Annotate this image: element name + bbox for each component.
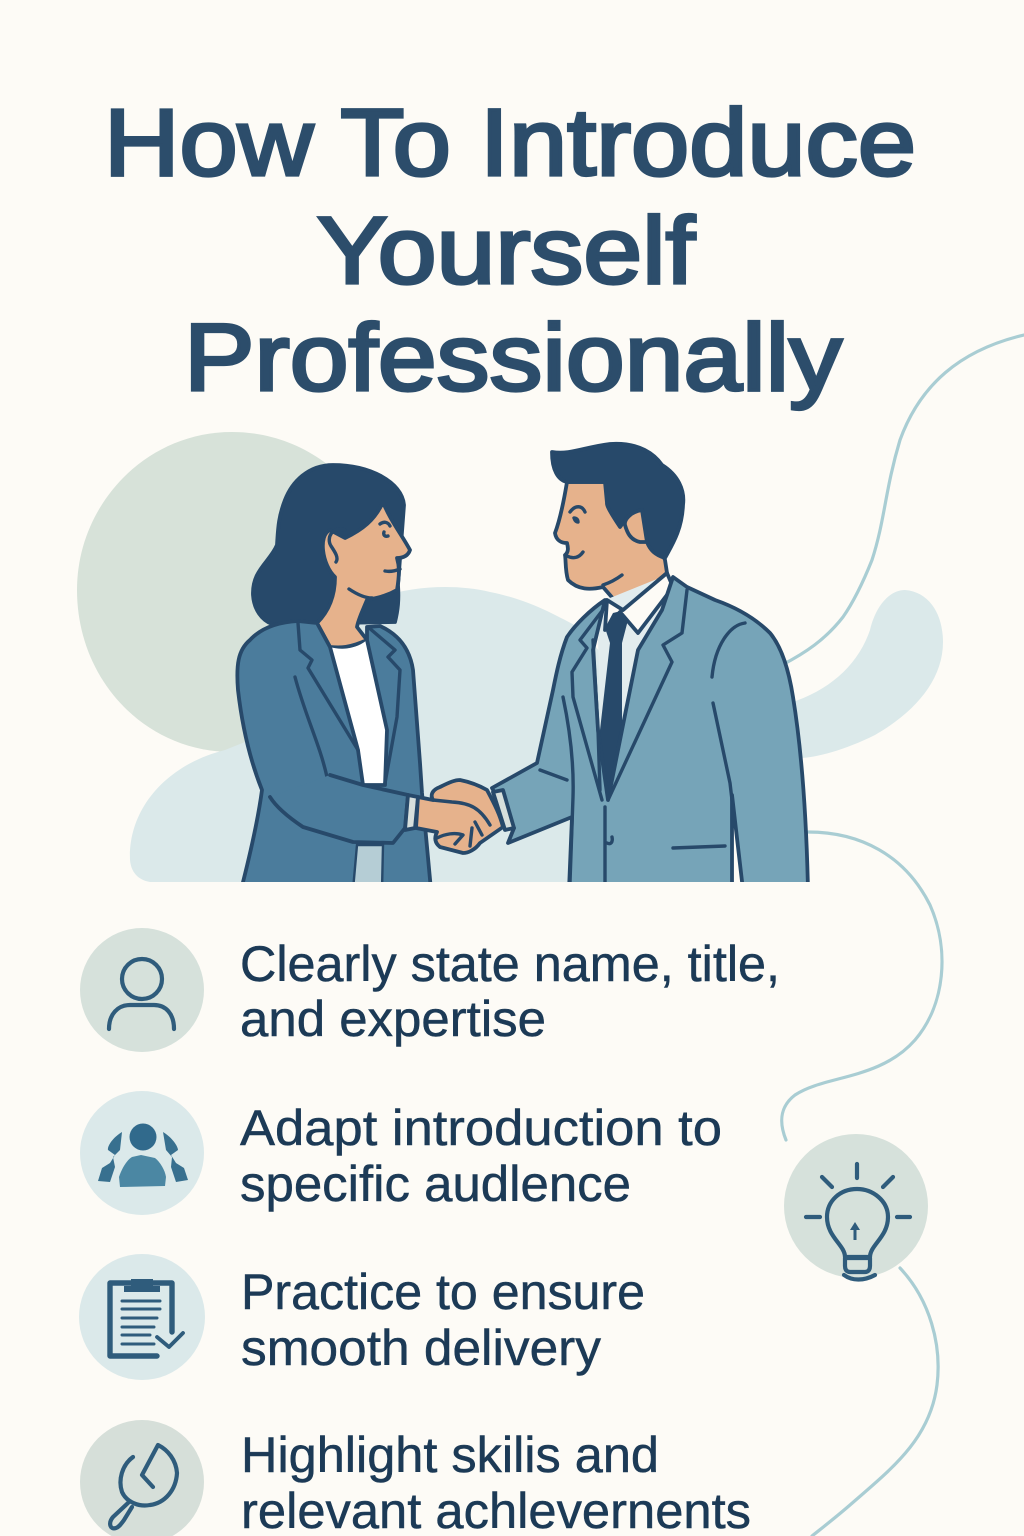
background blob: pale blue	[130, 587, 640, 882]
icon: clipboard checklist	[79, 1254, 205, 1380]
text: practice	[241, 1264, 645, 1376]
decorative connector: middle curve	[782, 832, 942, 1140]
illustration: man	[492, 444, 808, 890]
text: name, title, expertise: and expertise	[240, 991, 546, 1047]
man cuff	[493, 790, 514, 830]
woman white shirt	[330, 640, 387, 785]
woman facial features	[329, 522, 400, 598]
title: How To Introduce	[104, 90, 916, 196]
man collar	[605, 573, 673, 633]
text: name, title, expertise	[240, 936, 780, 1047]
list item 4	[80, 1420, 751, 1536]
man shirt	[598, 579, 662, 686]
woman cuff	[405, 795, 418, 830]
background blob: right swoosh	[790, 590, 943, 758]
text: highlight skills	[241, 1427, 751, 1536]
man ear and facial features	[567, 507, 647, 585]
woman blazer	[237, 621, 431, 890]
man tie	[600, 611, 628, 803]
icon: person	[80, 928, 204, 1052]
list item 2	[80, 1091, 722, 1215]
icon: audience	[80, 1091, 204, 1215]
title: Professionally	[184, 305, 843, 411]
icon: light bulb	[784, 1134, 928, 1280]
decorative connector: top right curve	[782, 335, 1024, 665]
list item 3	[79, 1254, 645, 1380]
text: adapt introduction: specific audlence	[240, 1156, 631, 1212]
woman shirt hem	[353, 845, 383, 890]
text: practice: smooth delivery	[241, 1320, 601, 1376]
text: practice: Practice to ensure	[241, 1264, 645, 1320]
man jacket details	[540, 590, 745, 882]
woman neck and face	[317, 502, 410, 647]
man hair	[552, 444, 683, 558]
text: adapt introduction: Adapt introduction to	[240, 1100, 722, 1156]
icon: magnifier leaf	[80, 1420, 204, 1536]
man jacket	[492, 577, 808, 890]
man neck and face	[555, 482, 667, 610]
illustration: woman	[237, 465, 431, 890]
woman blazer details	[270, 623, 408, 843]
handshake	[416, 780, 503, 853]
decorative connector: lower curve	[812, 1268, 938, 1536]
list item 1	[80, 928, 780, 1052]
text: name, title, expertise: Clearly state name, title,	[240, 936, 780, 992]
title	[104, 90, 916, 411]
text: highlight skills: Highlight skilis and	[241, 1427, 659, 1483]
woman hair	[253, 465, 404, 624]
text: adapt introduction	[240, 1100, 722, 1212]
background blob: green circle	[77, 432, 390, 752]
title: Yourself	[317, 198, 696, 304]
